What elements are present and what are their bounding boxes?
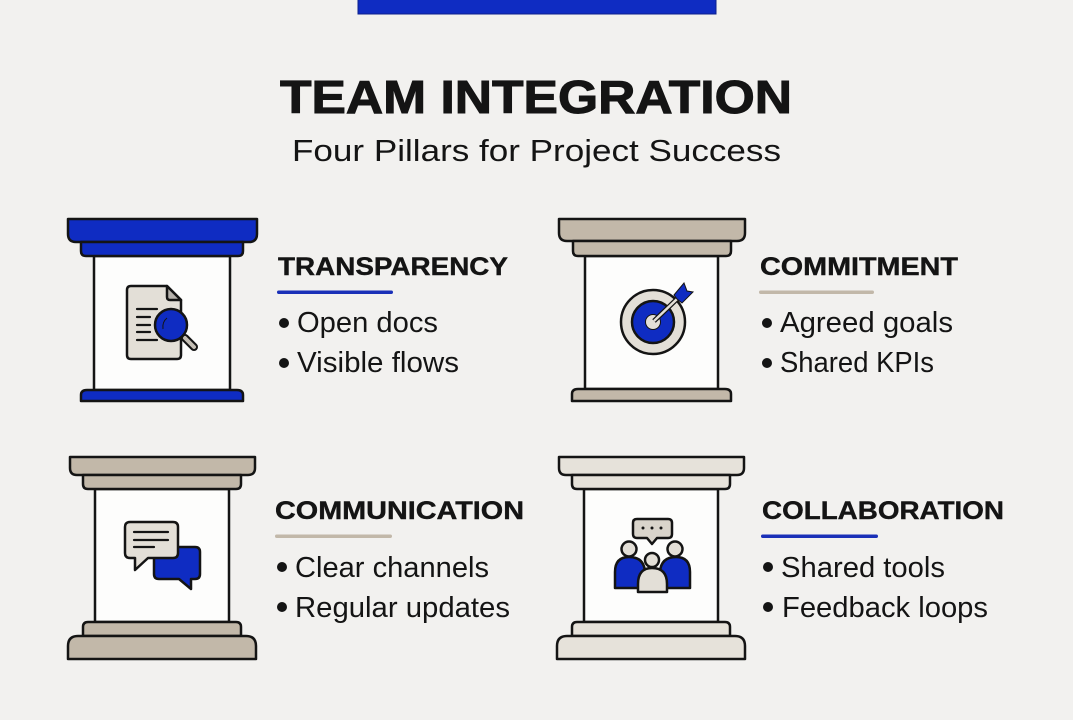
panel: commitment <box>559 219 958 401</box>
bullet list: collaboration: Feedback loops <box>782 592 988 624</box>
divider: collaboration <box>761 534 878 538</box>
bullet list: commitment: Shared KPIs <box>780 347 934 379</box>
bullet list: transparency <box>279 307 459 379</box>
pillar: transparency <box>68 219 257 401</box>
icon: chat bubbles <box>125 522 200 589</box>
bullet list: collaboration <box>763 552 988 624</box>
pillar: communication <box>68 457 256 659</box>
icon: document with magnifying glass <box>127 286 194 359</box>
bullet list: transparency: Open docs <box>297 307 438 339</box>
heading: transparency: TRANSPARENCY <box>278 253 508 281</box>
top accent bar <box>358 0 716 14</box>
divider: communication <box>275 534 392 538</box>
bullet list: communication: Regular updates <box>295 592 510 624</box>
divider: transparency <box>277 290 393 294</box>
bullet list: communication <box>277 552 510 624</box>
pillar: commitment <box>559 219 745 401</box>
panel: transparency <box>68 219 508 401</box>
icon: target with arrow <box>621 283 693 354</box>
heading: commitment: COMMITMENT <box>760 253 958 281</box>
panel: collaboration <box>557 457 1004 659</box>
icon: team with speech bubble <box>615 519 690 592</box>
bullet list: communication: Clear channels <box>295 552 489 584</box>
divider: commitment <box>759 290 874 294</box>
pillar: collaboration <box>557 457 745 659</box>
bullet list: collaboration: Shared tools <box>781 552 945 584</box>
bullet list: commitment: Agreed goals <box>780 307 953 339</box>
subtitle: Four Pillars for Project Success <box>292 133 781 168</box>
bullet list: transparency: Visible flows <box>297 347 459 379</box>
bullet list: commitment <box>762 307 953 379</box>
panel: communication <box>68 457 524 659</box>
heading: collaboration: COLLABORATION <box>762 497 1004 525</box>
title: TEAM INTEGRATION <box>280 71 792 123</box>
heading: communication: COMMUNICATION <box>275 497 524 525</box>
